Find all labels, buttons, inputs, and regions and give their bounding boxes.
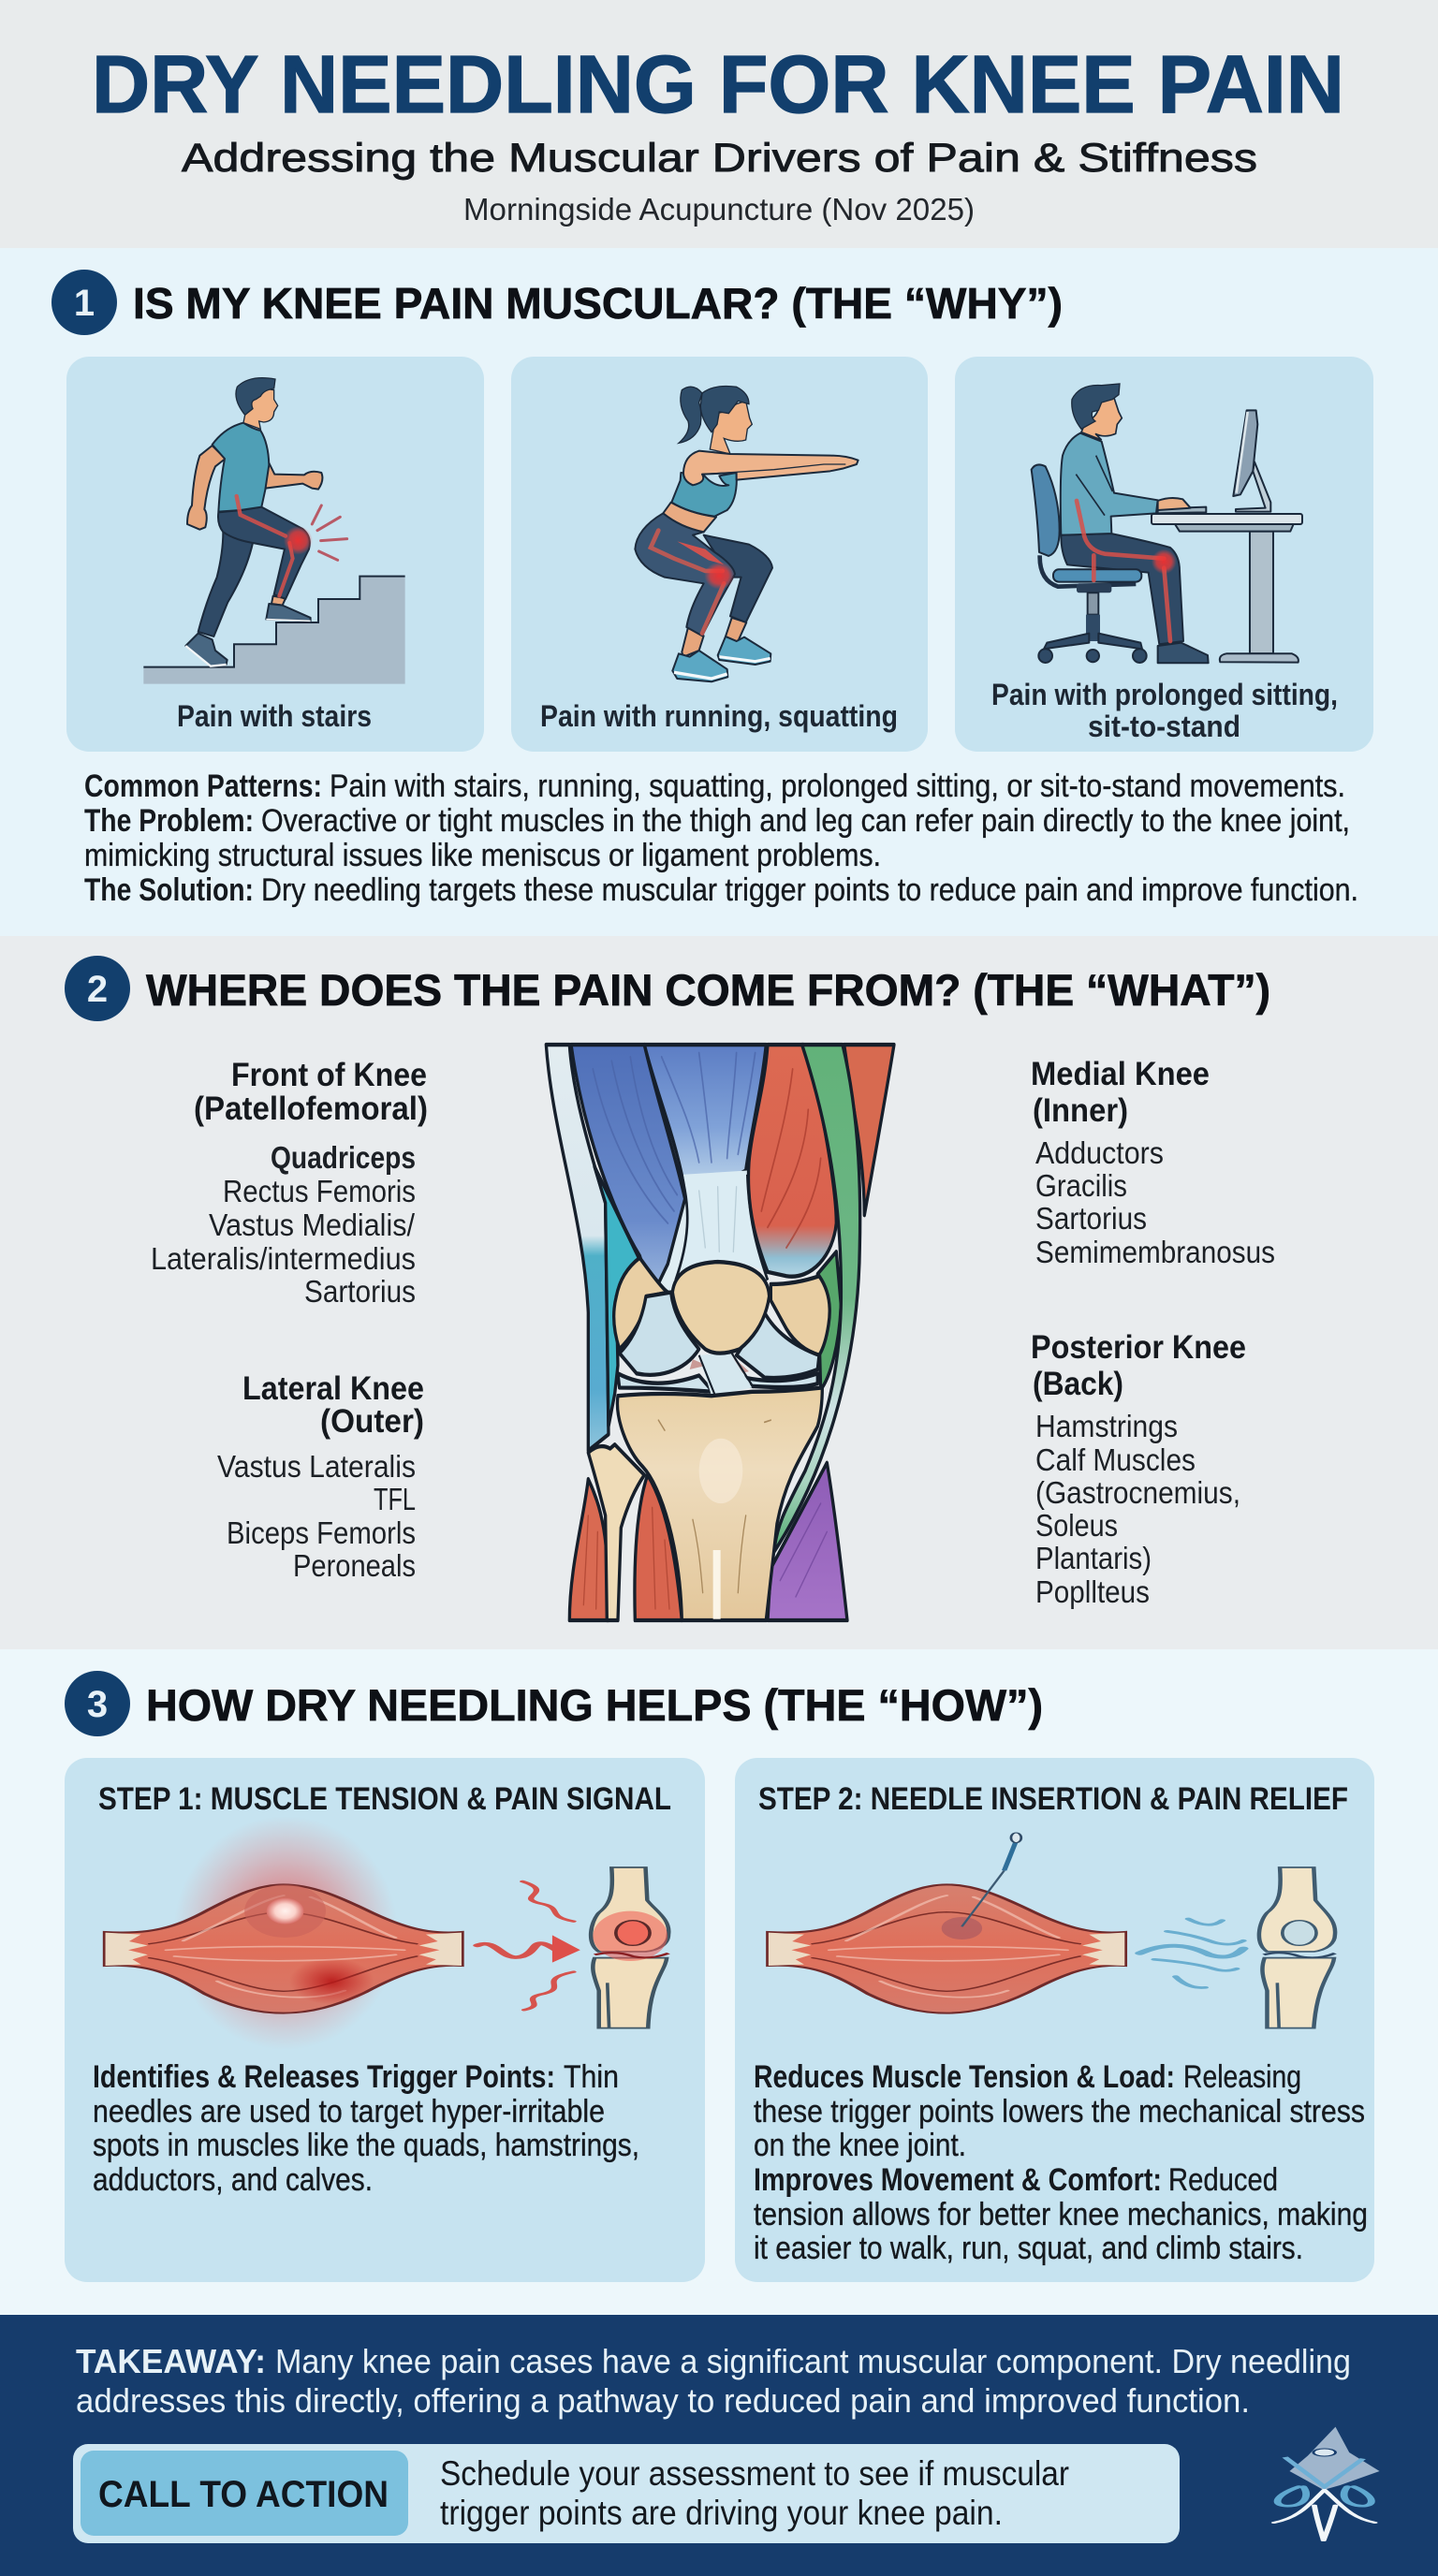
illustration: pain signals to knee <box>477 1867 668 2028</box>
section 1 heading: IS MY KNEE PAIN MUSCULAR? (THE “WHY”) <box>133 279 1063 328</box>
section 3 heading: HOW DRY NEEDLING HELPS (THE “HOW”) <box>146 1680 1043 1730</box>
panel: section 2 what <box>0 936 1438 1649</box>
step 1 text: needles are used to target hyper-irritable <box>93 2094 605 2130</box>
text block: posterior knee: Calf Muscles <box>1035 1442 1196 1477</box>
panel: header <box>0 0 1438 248</box>
section 2 number badge <box>65 956 130 1021</box>
title: DRY NEEDLING FOR KNEE PAIN <box>92 39 1344 130</box>
takeaway text: TAKEAWAY: <box>76 2342 266 2380</box>
call to action text: trigger points are driving your knee pain. <box>440 2494 1003 2532</box>
text block: medial knee: Medial Knee <box>1031 1056 1210 1092</box>
text block: patterns, problem, solution: Common Patterns: <box>84 768 322 804</box>
takeaway text <box>76 2342 1351 2420</box>
text block: lateral knee: Vastus Lateralis <box>217 1449 416 1484</box>
caption: sit-to-stand <box>1088 710 1240 743</box>
step 1 text <box>93 2059 639 2198</box>
card: pain with prolonged sitting <box>955 357 1373 752</box>
card: step 1 <box>65 1758 705 2282</box>
card: step 2 <box>735 1758 1374 2282</box>
step 2 text: Reduces Muscle Tension & Load: <box>754 2059 1175 2095</box>
section 2 number badge: 2 <box>87 969 108 1010</box>
text block: front of knee: Front of Knee <box>231 1057 427 1093</box>
step 2 text: Releasing <box>1183 2059 1301 2095</box>
step 1 text: Identifies & Releases Trigger Points: <box>93 2059 555 2095</box>
section 1 number badge <box>51 270 117 335</box>
text block: lateral knee: Biceps Femorls <box>227 1515 416 1550</box>
takeaway text: addresses this directly, offering a pathway to reduced pain and improved function. <box>76 2381 1250 2420</box>
call to action text <box>440 2454 1069 2532</box>
call to action label: CALL TO ACTION <box>98 2474 389 2515</box>
text block: medial knee: Adductors <box>1035 1135 1164 1170</box>
section 3 number badge: 3 <box>87 1684 108 1725</box>
text block: posterior knee: (Gastrocnemius, <box>1035 1475 1240 1510</box>
text block: front of knee: Sartorius <box>304 1274 416 1309</box>
section 1 number badge: 1 <box>74 283 95 324</box>
text block: medial knee <box>1031 1056 1275 1269</box>
text block: lateral knee <box>217 1370 424 1583</box>
panel: section 1 why <box>0 248 1438 936</box>
step 2 text: Improves Movement & Comfort: <box>754 2162 1162 2198</box>
step 2 text <box>754 2059 1368 2266</box>
illustration: muscle with needle <box>769 1833 1124 2013</box>
text block: patterns, problem, solution <box>84 768 1358 908</box>
call to action bar <box>73 2444 1180 2543</box>
takeaway text: Many knee pain cases have a significant muscular component. Dry needling <box>275 2342 1351 2380</box>
text block: patterns, problem, solution: The Solution: <box>84 872 254 908</box>
step 2 text: these trigger points lowers the mechanical stress <box>754 2094 1365 2130</box>
source line: Morningside Acupuncture (Nov 2025) <box>463 192 975 227</box>
text block: posterior knee <box>1031 1329 1246 1609</box>
step 2 text: it easier to walk, run, squat, and climb stairs. <box>754 2231 1303 2266</box>
text block: medial knee: Semimembranosus <box>1035 1235 1275 1269</box>
text block: front of knee: (Patellofemoral) <box>194 1090 428 1127</box>
text block: medial knee: Gracilis <box>1035 1168 1127 1203</box>
call to action label <box>81 2451 408 2536</box>
text block: lateral knee: TFL <box>374 1482 416 1516</box>
illustration: man climbing stairs <box>143 378 405 684</box>
text block: posterior knee: Hamstrings <box>1035 1409 1178 1443</box>
text block: posterior knee: Soleus <box>1035 1508 1118 1543</box>
panel: footer takeaway <box>0 2315 1438 2576</box>
text block: posterior knee: Posterior Knee <box>1031 1329 1246 1366</box>
text block: medial knee: Sartorius <box>1035 1201 1147 1236</box>
step 2 text: Reduced <box>1168 2162 1278 2198</box>
text block: medial knee: (Inner) <box>1033 1092 1128 1129</box>
text block: patterns, problem, solution: mimicking structural issues like meniscus or ligament problems. <box>84 838 881 873</box>
call to action text: Schedule your assessment to see if muscular <box>440 2454 1069 2493</box>
panel: section 3 how <box>0 1649 1438 2315</box>
text block: lateral knee: Lateral Knee <box>242 1370 424 1407</box>
step 1 title: STEP 1: MUSCLE TENSION & PAIN SIGNAL <box>98 1781 671 1817</box>
card: pain with running, squatting <box>511 357 928 752</box>
text block: lateral knee: (Outer) <box>320 1403 424 1440</box>
text block: posterior knee: (Back) <box>1033 1366 1123 1402</box>
text block: front of knee <box>151 1057 428 1309</box>
text block: patterns, problem, solution: Pain with stairs, running, squatting, prolonged sitting, or sit-to-stand movements. <box>330 768 1345 804</box>
step 2 text: tension allows for better knee mechanics, making <box>754 2197 1368 2232</box>
logo <box>1274 2427 1380 2540</box>
caption <box>991 678 1338 743</box>
subtitle: Addressing the Muscular Drivers of Pain & Stiffness <box>182 136 1257 181</box>
text block: front of knee: Rectus Femoris <box>223 1174 416 1208</box>
step 1 text: adductors, and calves. <box>93 2162 373 2198</box>
illustration: woman squatting <box>635 386 858 681</box>
caption: Pain with prolonged sitting, <box>991 678 1338 711</box>
text block: posterior knee: Popllteus <box>1035 1574 1150 1609</box>
step 1 text: spots in muscles like the quads, hamstrings, <box>93 2128 639 2163</box>
caption: Pain with running, squatting <box>540 699 898 733</box>
section 2 heading: WHERE DOES THE PAIN COME FROM? (THE “WHAT”) <box>146 965 1270 1015</box>
text block: posterior knee: Plantaris) <box>1035 1541 1152 1575</box>
text block: patterns, problem, solution: The Problem: <box>84 803 254 839</box>
text block: front of knee: Vastus Medialis/ <box>209 1208 416 1242</box>
illustration: tense muscle with trigger point <box>106 1816 462 2050</box>
step 2 text: on the knee joint. <box>754 2128 966 2163</box>
text block: lateral knee: Peroneals <box>293 1548 416 1583</box>
illustration: knee anatomy <box>546 1045 894 1620</box>
step 2 title: STEP 2: NEEDLE INSERTION & PAIN RELIEF <box>758 1781 1348 1817</box>
text block: front of knee: Quadriceps <box>271 1140 416 1175</box>
caption: Pain with stairs <box>177 699 372 733</box>
illustration: relief waves and healthy knee <box>1140 1867 1335 2028</box>
text block: front of knee: Lateralis/intermedius <box>151 1241 416 1276</box>
step 1 text: Thin <box>564 2059 619 2095</box>
card: pain with stairs <box>66 357 484 752</box>
illustration: man sitting at desk <box>1032 384 1302 663</box>
section 3 number badge <box>65 1671 130 1736</box>
